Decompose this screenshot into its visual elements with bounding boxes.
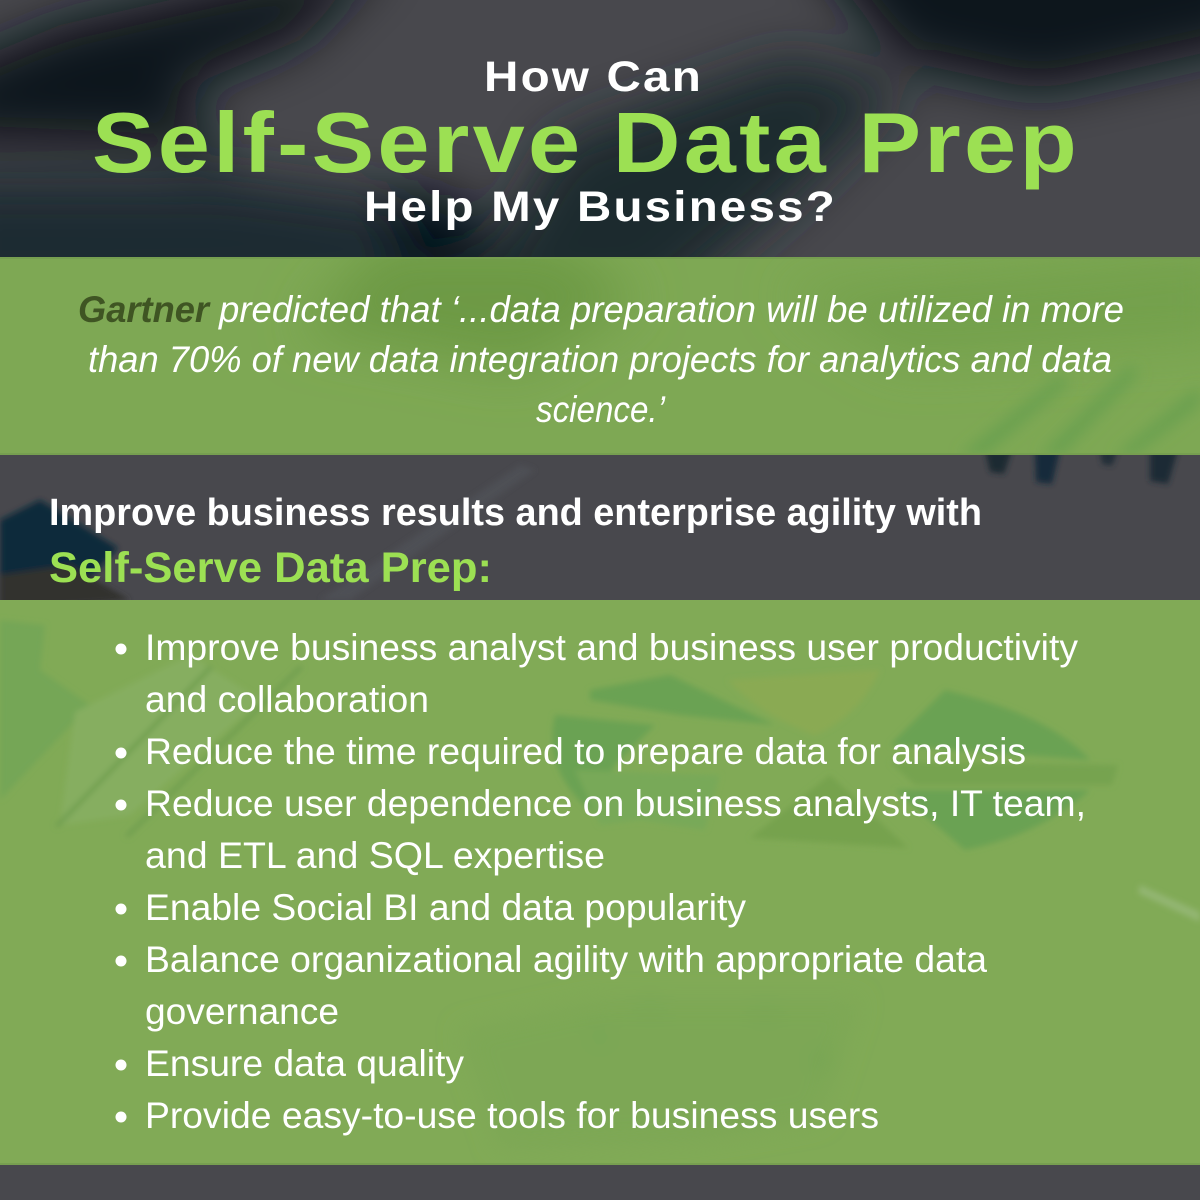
bullet: governance xyxy=(116,939,987,1032)
bullet: productivity: Improve business analyst and business user productivity xyxy=(145,627,1078,668)
bullet: time: Reduce the time required to prepare data for analysis xyxy=(145,731,1026,772)
faded pie chart and paper xyxy=(0,620,1200,922)
quote line 2: than 70% of new data integration projects for analytics and data xyxy=(88,339,1112,380)
bullet: dependence xyxy=(116,783,1086,876)
bullet: governance: Balance organizational agility with appropriate data xyxy=(145,939,987,980)
bullet: tools: Provide easy-to-use tools for business users xyxy=(145,1095,879,1136)
title line: How Can: How Can xyxy=(484,53,703,101)
subheading line 1: Improve business results and enterprise agility with xyxy=(49,492,982,534)
subheading line 2: Self-Serve Data Prep: xyxy=(49,544,492,592)
benefits bullet list xyxy=(116,627,1086,1136)
bullet: productivity xyxy=(116,627,1078,720)
title line: Self-Serve Data Prep: Self-Serve Data Prep xyxy=(92,96,1080,191)
quote line 3: science.’ xyxy=(536,389,666,430)
bullet: social BI: Enable Social BI and data popularity xyxy=(145,887,746,928)
bullet: productivity: and collaboration xyxy=(145,679,429,720)
title xyxy=(92,53,1080,231)
quote line 1: predicted that ‘...data preparation will be utilized in more xyxy=(218,289,1124,330)
bullet: governance: governance xyxy=(145,991,339,1032)
header panel: blurred dark photo background xyxy=(0,0,1200,257)
quote attribution: Gartner: Gartner xyxy=(78,289,212,330)
bullet: dependence: Reduce user dependence on business analysts, IT team, xyxy=(145,783,1086,824)
title line: Help My Business?: Help My Business? xyxy=(364,183,837,231)
panel: benefits green band background xyxy=(0,600,1200,1165)
bullet: quality: Ensure data quality xyxy=(145,1043,464,1084)
bullet: dependence: and ETL and SQL expertise xyxy=(145,835,605,876)
quote text block xyxy=(78,289,1124,430)
panel: Gartner quote green band xyxy=(0,240,1200,455)
panel: subheading dark band background xyxy=(0,450,1178,610)
subheading xyxy=(49,492,982,592)
